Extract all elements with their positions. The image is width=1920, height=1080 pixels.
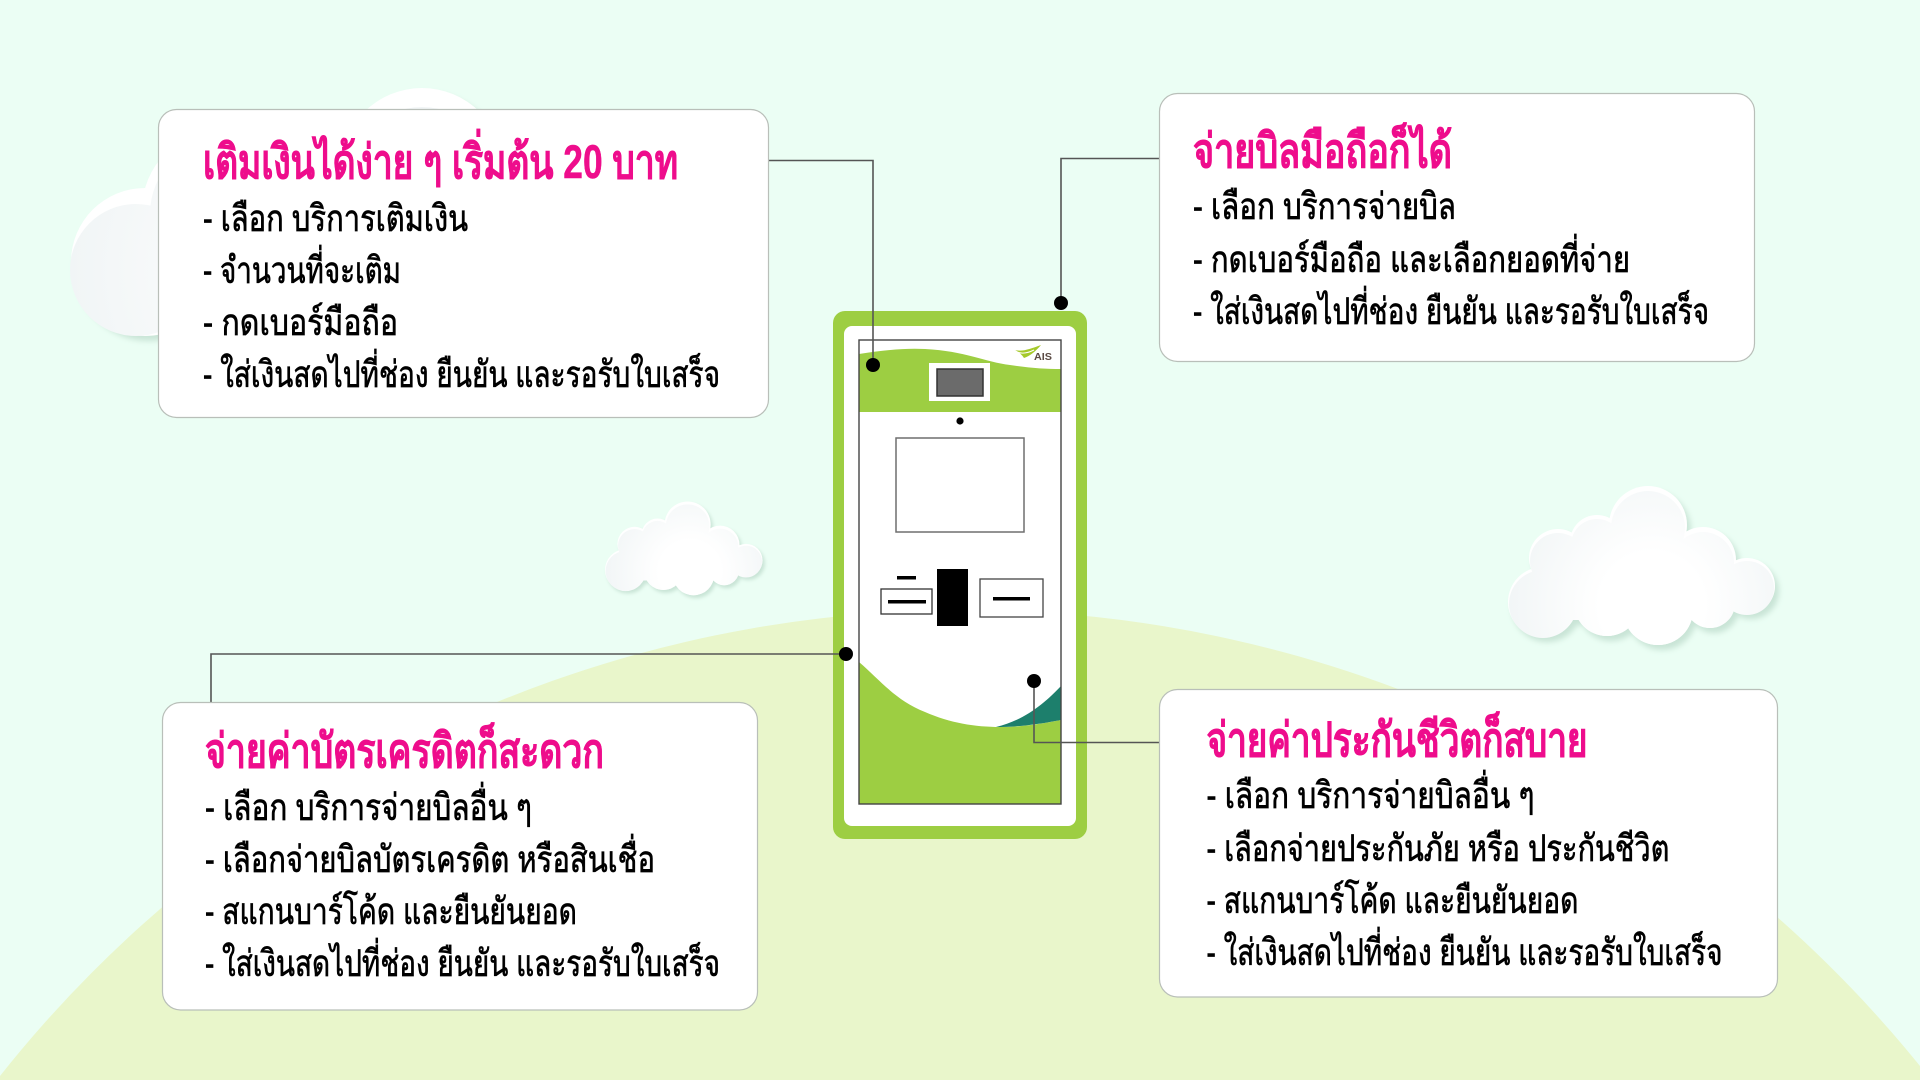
panel: mobile bill — [1160, 94, 1754, 362]
panel: life insurance — [1160, 690, 1778, 997]
heading: top up: เติมเงินได้ง่าย ๆ เริ่มต้น 20 บาท — [203, 128, 678, 188]
heading: life insurance: จ่ายค่าประกันชีวิตก็สบาย — [1206, 710, 1588, 766]
kiosk white body — [844, 326, 1076, 826]
steps: top up: - จำนวนที่จะเติม — [203, 244, 401, 291]
kiosk teal accent — [996, 686, 1061, 727]
heading: mobile bill: จ่ายบิลมือถือก็ได้ — [1193, 121, 1452, 177]
touch screen — [896, 438, 1024, 532]
cloud: top left — [70, 88, 504, 336]
right slot — [980, 579, 1043, 617]
left slot dash — [897, 576, 916, 580]
kiosk inner outline — [859, 340, 1061, 804]
steps: mobile bill: - กดเบอร์มือถือ และเลือกยอดที่จ่าย — [1193, 233, 1630, 280]
cloud: right large — [1508, 486, 1775, 645]
steps: credit card: - เลือก บริการจ่ายบิลอื่น ๆ — [205, 781, 532, 828]
steps: credit card: - เลือกจ่ายบิลบัตรเครดิต หรือสินเชื่อ — [205, 833, 655, 880]
black cash slot — [937, 569, 968, 626]
steps: top up: - กดเบอร์มือถือ — [203, 302, 398, 343]
heading: credit card: จ่ายค่าบัตรเครดิตก็สะดวก — [205, 721, 604, 777]
panel: credit card — [162, 702, 758, 1010]
steps: life insurance: - ใส่เงินสดไปที่ช่อง ยืนยัน และรอรับใบเสร็จ — [1206, 926, 1722, 973]
steps: top up: - เลือก บริการเติมเงิน — [203, 198, 468, 239]
steps: mobile bill: - เลือก บริการจ่ายบิล — [1193, 186, 1456, 227]
panel: top up — [158, 110, 768, 418]
camera — [929, 363, 990, 401]
sensor dot — [956, 417, 964, 425]
kiosk machine — [833, 311, 1087, 839]
connector: credit card panel to kiosk — [211, 647, 853, 702]
connector: mobile bill card to kiosk — [1054, 158, 1160, 310]
steps: top up — [203, 198, 720, 395]
steps: credit card: - สแกนบาร์โค้ด และยืนยันยอด — [205, 890, 577, 932]
connector: insurance card to kiosk — [1027, 674, 1160, 742]
logo: AIS: AIS — [1034, 351, 1052, 363]
steps: life insurance — [1206, 769, 1722, 973]
hill — [0, 610, 1920, 1080]
steps: life insurance: - สแกนบาร์โค้ด และยืนยันยอด — [1206, 879, 1578, 921]
kiosk green frame — [833, 311, 1087, 839]
steps: mobile bill: - ใส่เงินสดไปที่ช่อง ยืนยัน และรอรับใบเสร็จ — [1193, 285, 1709, 332]
steps: credit card — [205, 781, 720, 984]
left slot — [881, 589, 932, 614]
steps: life insurance: - เลือกจ่ายประกันภัย หรือ ประกันชีวิต — [1206, 828, 1670, 869]
steps: top up: - ใส่เงินสดไปที่ช่อง ยืนยัน และรอรับใบเสร็จ — [203, 348, 720, 395]
connector: top-up card to kiosk — [769, 160, 880, 372]
steps: mobile bill — [1193, 186, 1709, 332]
kiosk top green wave — [859, 349, 1061, 412]
cloud: centre small — [605, 501, 763, 595]
steps: life insurance: - เลือก บริการจ่ายบิลอื่น ๆ — [1206, 769, 1534, 816]
kiosk bottom green wave — [859, 662, 1061, 804]
steps: credit card: - ใส่เงินสดไปที่ช่อง ยืนยัน และรอรับใบเสร็จ — [205, 937, 720, 984]
logo: AIS — [1015, 345, 1052, 363]
